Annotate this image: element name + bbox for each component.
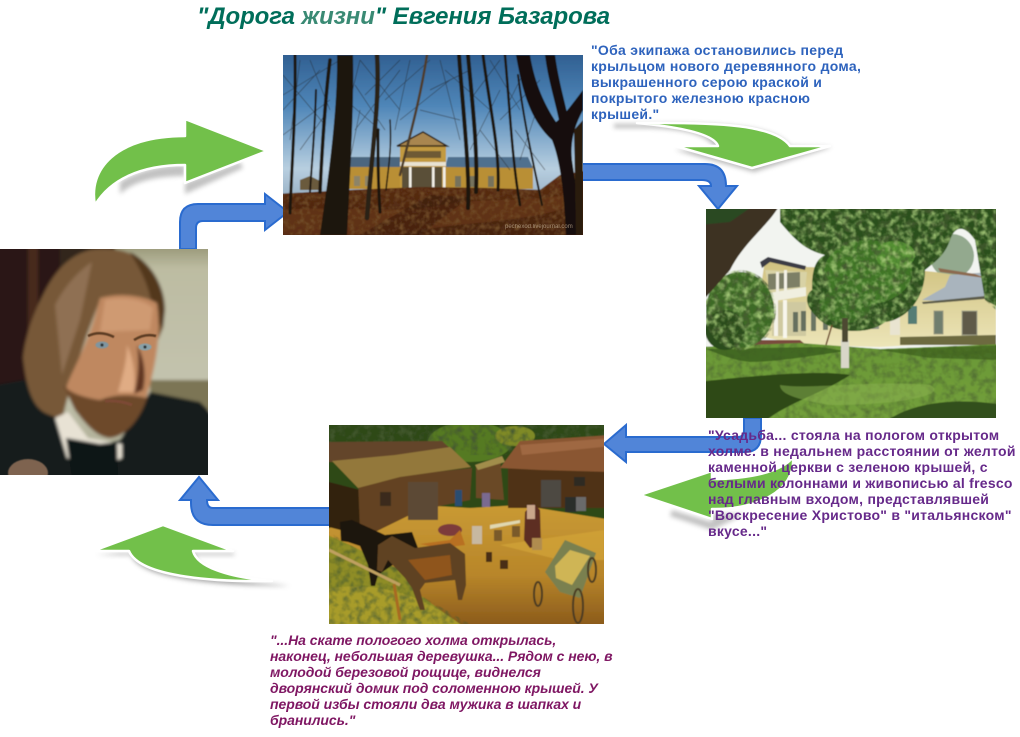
text block: maroon quote: "...На скате пологого холма открылась,: [270, 632, 556, 648]
arrow: blue portrait to first photo: [180, 194, 288, 249]
beard: [63, 385, 147, 438]
coat: [0, 380, 208, 475]
arrow: blue second photo to third photo: [604, 418, 761, 462]
arrow: green curved to portrait: [93, 525, 290, 586]
grass: [706, 342, 996, 418]
big trunk top-left: [706, 209, 778, 298]
canopy: [780, 201, 1004, 331]
back shed: [476, 458, 504, 500]
house wings: [346, 166, 533, 189]
text block: purple quote: белыми колоннами и живописью al fresco: [708, 475, 1013, 491]
text block: blue quote: крыльцом нового деревянного дома,: [591, 58, 861, 74]
text block: blue quote: покрытого железною красною: [591, 90, 810, 106]
text block: purple quote: "Воскресение Христово" в "итальянском": [708, 507, 1012, 523]
photo: manor among autumn trees: [283, 55, 583, 235]
text block: blue quote: [591, 42, 861, 122]
hay left: [329, 535, 442, 611]
arrow: blue first photo to second photo: [582, 164, 737, 209]
ground: [329, 504, 604, 624]
eyes: [96, 342, 108, 348]
house: [755, 258, 996, 347]
people: [455, 490, 462, 506]
left bush: [706, 272, 774, 348]
dark horse: [340, 520, 418, 586]
big trees: [320, 55, 353, 235]
text block: maroon quote: бранились.": [270, 712, 355, 728]
orange horse back: [422, 530, 465, 546]
text block: purple quote: каменной церкви с зеленою крышей, с: [708, 459, 988, 475]
text block: blue quote: "Оба экипажа остановились перед: [591, 42, 843, 58]
fence rail: [329, 550, 400, 585]
arrow: green curved to second photo: [614, 123, 832, 172]
collar: [55, 412, 122, 468]
photo: portrait of Bazarov: [0, 249, 208, 475]
cart: [545, 540, 596, 598]
watermark: pechexod.livejournal.com: [505, 224, 573, 230]
text block: blue quote: выкрашенного серою краской и: [591, 74, 822, 90]
left hut: [329, 482, 360, 530]
text block: purple quote: [708, 427, 1016, 539]
ground: [283, 170, 583, 235]
text block: purple quote: "Усадьба... стояла на пологом открытом: [708, 427, 999, 443]
face: [65, 293, 161, 402]
text block: maroon quote: [270, 632, 613, 728]
title: "Дорога жизни" Евгения Базарова: [197, 3, 610, 30]
text block: maroon quote: молодой березовой рощице, виднелся: [270, 664, 541, 680]
text block: maroon quote: первой избы стояли два мужика в шапках и: [270, 696, 581, 712]
brown horse: [377, 536, 466, 610]
white painted trunk: [841, 340, 849, 368]
text block: blue quote: крышей.": [591, 106, 659, 122]
right hut: [508, 468, 612, 508]
photo: manor house with lawn and tree: [706, 209, 996, 418]
arrow: green curved to third photo: [640, 457, 793, 530]
fine branches: [283, 60, 545, 170]
text block: purple quote: холме. в недальнем расстоянии от желтой: [708, 443, 1016, 459]
text block: maroon quote: наконец, небольшая деревушка... Рядом с нею, в: [270, 648, 613, 664]
text block: purple quote: вкусе...": [708, 523, 767, 539]
text block: purple quote: над главным входом, представлявшей: [708, 491, 989, 507]
thin trunks: [290, 55, 542, 218]
distant trees: [930, 234, 974, 278]
arrow: blue third photo to portrait: [180, 477, 330, 525]
hair: [23, 249, 164, 420]
arrow: green curved to first photo: [94, 119, 267, 205]
photo: village yard with horses: [329, 425, 604, 624]
text block: maroon quote: дворянский домик под соломенною крышей. У: [270, 680, 598, 696]
